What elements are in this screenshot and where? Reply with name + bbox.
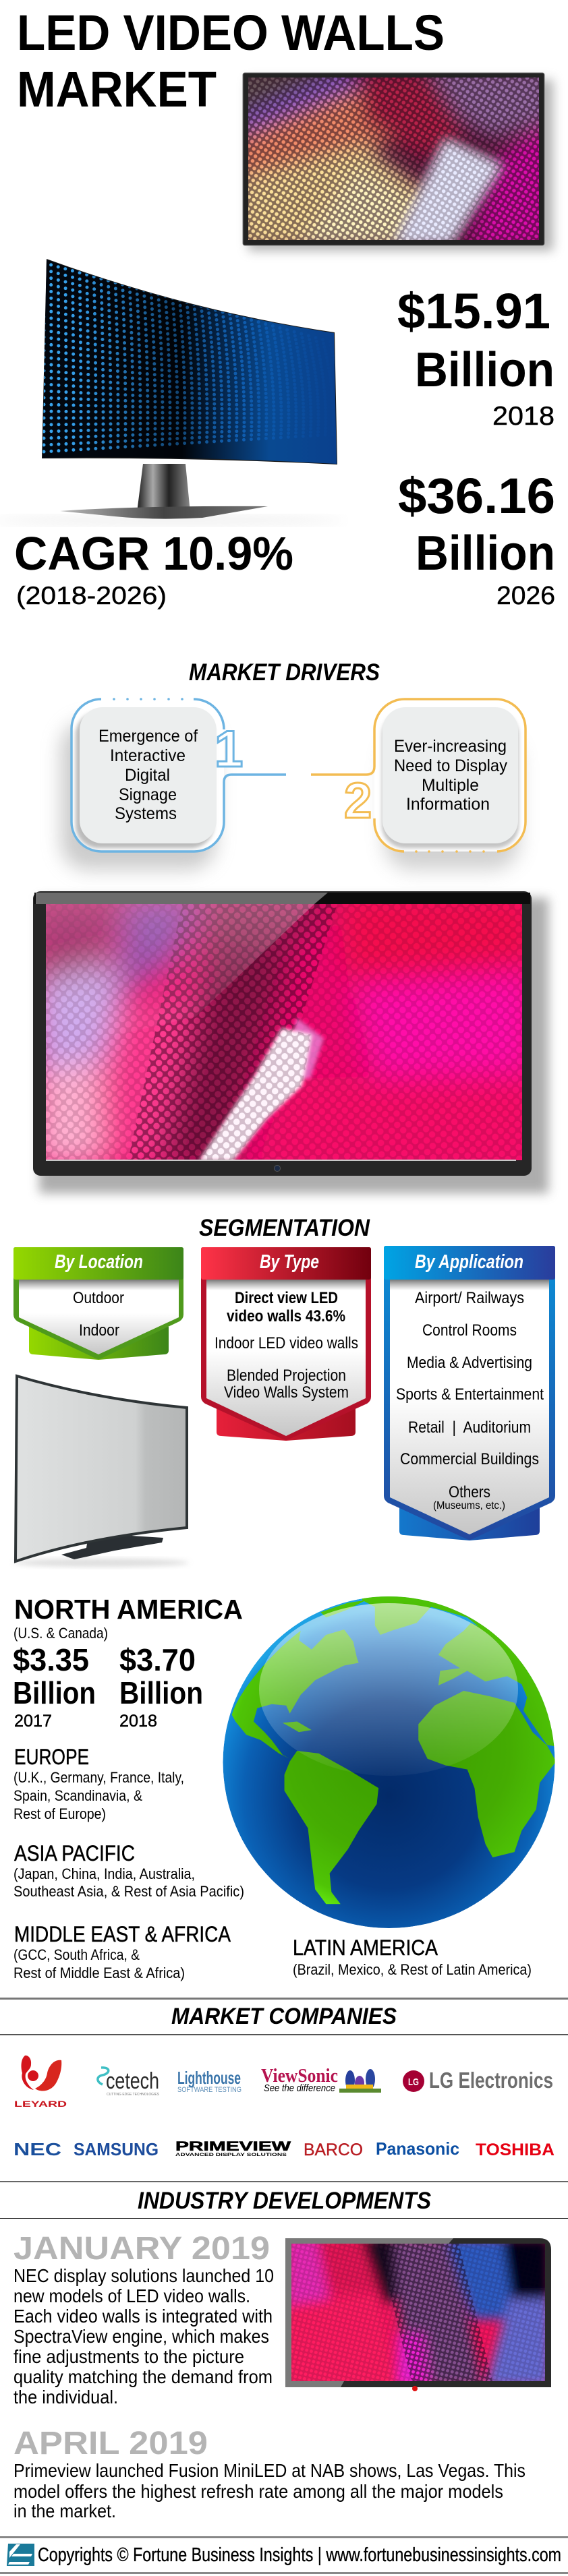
- text: driver 2 label: Information: [406, 795, 490, 814]
- text: europe: Rest of Europe): [13, 1805, 106, 1822]
- panel: by type: [201, 1247, 371, 1441]
- title: MARKET: [17, 61, 217, 117]
- text: middle east and africa: (GCC, South Africa, &: [13, 1946, 140, 1963]
- logo: Primeview: ADVANCED DISPLAY SOLUTIONS: [175, 2153, 287, 2157]
- logo: Lighthouse: SOFTWARE TESTING: [177, 2086, 242, 2094]
- text: europe: [13, 1745, 184, 1822]
- stat: 2026 market size: $36.16: [398, 468, 555, 524]
- logo: ViewSonic: ViewSonic: [261, 2066, 338, 2087]
- text: middle east and africa: MIDDLE EAST & AFRICA: [14, 1922, 231, 1946]
- panel: driver 2: [311, 699, 526, 870]
- text: January 2019 development: Each video walls is integrated with: [13, 2306, 273, 2327]
- heading: by type: By Type: [260, 1251, 319, 1273]
- text: January 2019 development: SpectraView engine, which makes: [13, 2326, 269, 2347]
- text: January 2019 development: [13, 2265, 274, 2407]
- stat: 2026 market size: 2026: [496, 582, 555, 610]
- text: driver 2 label: [394, 737, 507, 814]
- stat: 2018: $3.70: [119, 1642, 196, 1677]
- text: asia pacific: (Japan, China, India, Australia,: [13, 1865, 195, 1882]
- text: asia pacific: [13, 1841, 244, 1900]
- text: location items: [73, 1289, 124, 1340]
- stat: 2017: [13, 1642, 96, 1731]
- text: application items: Control Rooms: [422, 1321, 517, 1340]
- text: europe: (U.K., Germany, France, Italy,: [13, 1769, 184, 1786]
- text: driver 1 label: Signage: [119, 785, 177, 804]
- logo: NEC: NEC: [13, 2139, 61, 2159]
- text: application items: (Museums, etc.): [433, 1500, 505, 1511]
- text: driver 1 label: [98, 727, 198, 823]
- text: application items: Retail | Auditorium: [408, 1418, 531, 1437]
- text: application items: [396, 1289, 544, 1511]
- heading: by application: By Application: [415, 1251, 523, 1273]
- icon: camera: [274, 1165, 281, 1172]
- text: application items: Media & Advertising: [407, 1354, 532, 1372]
- text: type items: Indoor LED video walls: [215, 1334, 358, 1352]
- text: driver 1 label: Emergence of: [98, 727, 198, 746]
- logo: Toshiba: TOSHIBA: [476, 2140, 555, 2159]
- image: large LED television: [33, 891, 548, 1193]
- panel: by location: [13, 1247, 183, 1360]
- text: asia pacific: ASIA PACIFIC: [14, 1841, 135, 1865]
- image: curved LED monitor: [42, 259, 337, 525]
- text: type items: video walls 43.6%: [227, 1307, 345, 1325]
- text: type items: Direct view LED: [235, 1289, 338, 1307]
- stat: CAGR: (2018-2026): [16, 582, 167, 609]
- text: europe: Spain, Scandinavia, &: [13, 1787, 142, 1804]
- logo: Primeview: [175, 2140, 291, 2157]
- text: application items: Commercial Buildings: [400, 1450, 539, 1468]
- logo: ViewSonic: [261, 2066, 381, 2094]
- stat: 2017: Billion: [13, 1675, 96, 1710]
- text: type items: Video Walls System: [224, 1383, 349, 1402]
- stat: 2018 market size: 2018: [492, 402, 555, 431]
- text: driver 2 label: Ever-increasing: [394, 737, 507, 756]
- stat: 2026 market size: [398, 468, 555, 610]
- logo: LG Electronics: LG: [408, 2076, 419, 2088]
- text: April 2019 development: model offers the highest refresh rate among all the major models: [13, 2481, 503, 2502]
- text: January 2019 development: quality matching the demand from: [13, 2366, 273, 2387]
- heading: market companies: MARKET COMPANIES: [171, 2004, 397, 2029]
- footer: [0, 2536, 568, 2574]
- stat: 2018: 2018: [119, 1712, 157, 1731]
- icon: outlined number 1: 1: [215, 721, 243, 778]
- heading: by location: By Location: [55, 1251, 143, 1273]
- stat: 2026 market size: Billion: [416, 527, 555, 580]
- text: January 2019 development: new models of LED video walls.: [13, 2285, 250, 2306]
- title: LED VIDEO WALLS: [17, 5, 445, 61]
- logo: Leyard: [14, 2056, 67, 2109]
- text: type items: [215, 1289, 358, 1402]
- stat: 2018 market size: Billion: [415, 343, 555, 397]
- heading: market drivers: MARKET DRIVERS: [189, 659, 380, 686]
- stat: 2017: $3.35: [13, 1642, 89, 1677]
- logo: cetech: cetech: [106, 2068, 159, 2094]
- text: driver 2 label: Multiple: [422, 776, 479, 795]
- text: January 2019 development: fine adjustments to the picture: [13, 2346, 244, 2367]
- text: location items: Outdoor: [73, 1289, 124, 1307]
- logo: Panasonic: Panasonic: [376, 2138, 459, 2159]
- logo: Leyard: LEYARD: [14, 2099, 67, 2109]
- heading: industry developments: INDUSTRY DEVELOPMENTS: [138, 2188, 431, 2214]
- text: asia pacific: Southeast Asia, & Rest of Asia Pacific): [13, 1883, 244, 1900]
- heading: market companies: [0, 1998, 568, 2035]
- text: middle east and africa: [13, 1922, 231, 1981]
- text: driver 1 label: Interactive: [110, 746, 186, 765]
- logo: Fortune Business Insights: [7, 2544, 34, 2566]
- image: top LED monitor: [229, 67, 553, 251]
- text: application items: Sports & Entertainment: [396, 1385, 544, 1404]
- text: January 2019 development: the individual.: [13, 2387, 118, 2407]
- icon: globe: [223, 1594, 565, 1928]
- logo: cetech: [98, 2068, 160, 2097]
- panel: north america: NORTH AMERICA: [14, 1594, 243, 1625]
- logo: Samsung: SAMSUNG: [74, 2139, 159, 2159]
- icon: red indicator: [412, 2386, 418, 2391]
- logo: Lighthouse: Lighthouse: [177, 2068, 241, 2088]
- stat: CAGR: CAGR 10.9%: [14, 527, 293, 580]
- text: driver 2 label: Need to Display: [394, 756, 507, 775]
- text: April 2019 development: in the market.: [13, 2500, 116, 2521]
- logo: cetech: CUTTING EDGE TECHNOLOGIES: [107, 2093, 160, 2097]
- logo: ViewSonic: See the difference: [264, 2083, 335, 2094]
- stat: 2018 market size: $15.91: [397, 283, 550, 339]
- text: location items: Indoor: [79, 1321, 119, 1340]
- text: driver 1 label: Digital: [125, 766, 170, 785]
- text: application items: Airport/ Railways: [415, 1289, 524, 1307]
- panel: by application: [384, 1246, 555, 1540]
- stat: CAGR: [14, 527, 293, 609]
- heading: April 2019: APRIL 2019: [13, 2426, 208, 2461]
- logo: Lighthouse: [177, 2068, 242, 2094]
- image: blank curved television: [13, 1376, 189, 1567]
- logo: Barco: BARCO: [304, 2140, 363, 2159]
- text: latin america: (Brazil, Mexico, & Rest of Latin America): [293, 1961, 532, 1978]
- stat: 2017: 2017: [14, 1712, 52, 1731]
- text: type items: Blended Projection: [227, 1367, 346, 1385]
- text: driver 1 label: Systems: [115, 804, 177, 823]
- text: January 2019 development: NEC display solutions launched 10: [13, 2265, 274, 2286]
- title: [17, 5, 445, 117]
- heading: segmentation: SEGMENTATION: [199, 1215, 370, 1241]
- panel: north america: (U.S. & Canada): [13, 1625, 108, 1642]
- text: latin america: LATIN AMERICA: [293, 1936, 438, 1960]
- stat: 2018: [119, 1642, 203, 1731]
- heading: January 2019: JANUARY 2019: [13, 2231, 270, 2267]
- stat: 2018 market size: [397, 283, 555, 431]
- text: latin america: [293, 1936, 532, 1978]
- logo: Primeview: PRIMEVIEW: [175, 2140, 291, 2154]
- panel: driver 1: [61, 698, 286, 870]
- icon: outlined number 2: 2: [344, 773, 372, 829]
- panel: north america: [13, 1594, 243, 1731]
- stat: 2018: Billion: [119, 1675, 203, 1710]
- image: small LED television: [285, 2238, 551, 2391]
- text: middle east and africa: Rest of Middle East & Africa): [13, 1965, 185, 1981]
- text: April 2019 development: [13, 2460, 526, 2521]
- text: europe: EUROPE: [14, 1745, 89, 1769]
- text: application items: Others: [449, 1483, 490, 1501]
